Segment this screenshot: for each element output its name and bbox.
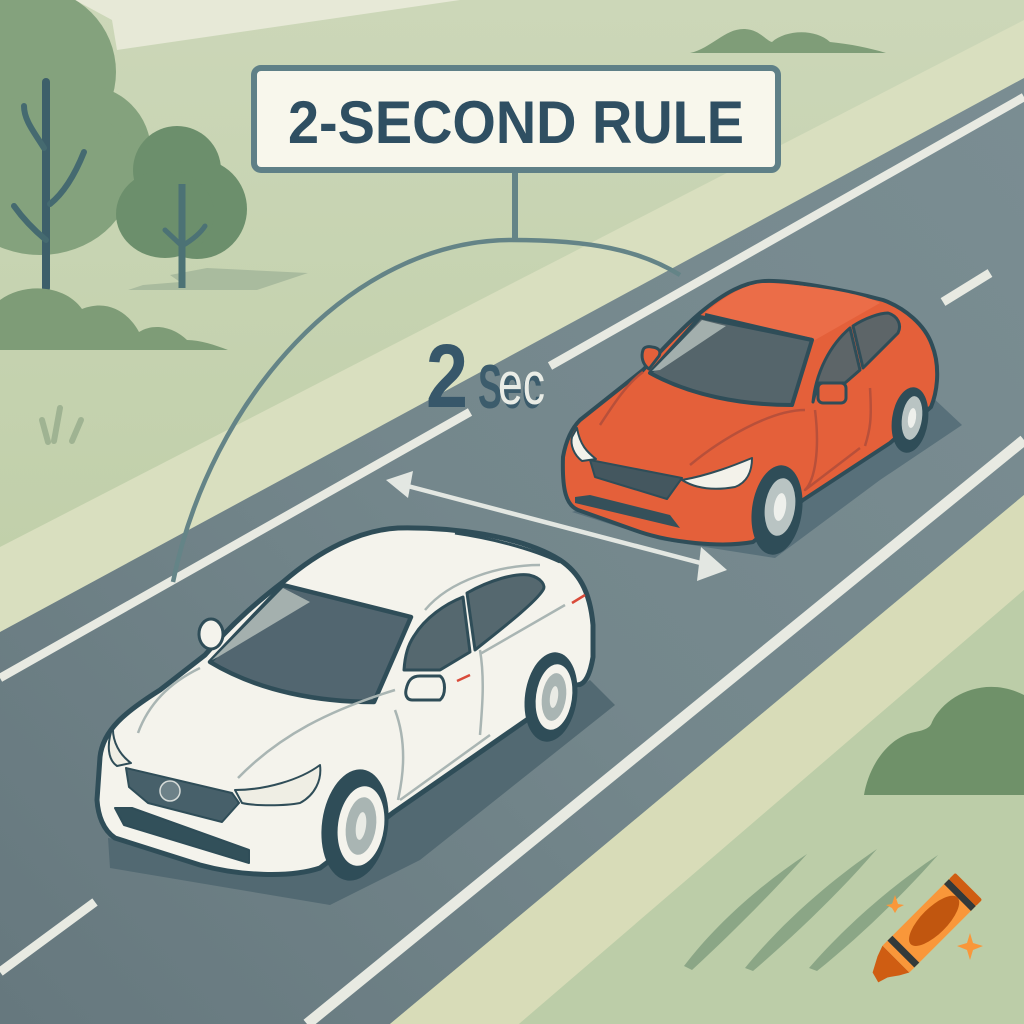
arc: timing arc	[173, 240, 680, 582]
distance arrow	[386, 471, 727, 581]
white car rear wheel	[519, 649, 583, 745]
white car side windows	[404, 597, 470, 670]
white car red accents	[457, 595, 585, 681]
label: 2 sec: 2	[426, 327, 468, 427]
white car headlights	[235, 765, 320, 805]
tree: small tree	[116, 126, 247, 288]
white car logo	[160, 781, 180, 801]
sign: 2-second rule: 2-SECOND RULE	[288, 89, 744, 156]
red car panel lines	[600, 372, 871, 490]
red car windshield	[650, 317, 812, 405]
icon: sparkles	[886, 895, 983, 960]
red car roof	[705, 283, 880, 340]
background: lower grass	[519, 590, 1024, 1024]
red car front wheel	[746, 462, 808, 558]
red car body	[563, 281, 937, 544]
white car mirrors	[406, 676, 444, 700]
white car intake	[115, 808, 249, 863]
sign: 2-second rule	[254, 68, 778, 170]
white car grille	[126, 768, 239, 822]
bush: left	[0, 288, 228, 350]
grass strokes: lower right	[684, 849, 938, 971]
background: beige verge upper	[0, 20, 1024, 640]
label: 2 sec	[426, 327, 545, 427]
label: 2 sec: ec	[498, 350, 545, 417]
tree: large left tree	[0, 0, 151, 288]
car: white	[97, 528, 615, 905]
white car windshield	[210, 585, 411, 702]
sign post	[512, 170, 518, 242]
label: 2 sec: Sec	[478, 353, 542, 422]
white car shadow	[108, 680, 615, 905]
red car headlights	[682, 458, 752, 489]
red car intake	[575, 495, 680, 528]
red car rear wheel	[888, 385, 932, 455]
bush: distant top	[690, 29, 886, 53]
white car panel lines	[138, 565, 565, 800]
white car front wheel	[315, 765, 395, 885]
grass tuft: left	[42, 408, 81, 442]
icon: crayon	[862, 873, 982, 993]
red car shadow	[572, 395, 962, 558]
red car grille	[590, 460, 682, 499]
red car mirrors	[818, 383, 846, 403]
background: beige verge lower	[390, 495, 1024, 1024]
white car body	[97, 528, 593, 874]
tree shadow	[128, 268, 308, 290]
background: pale sky band	[75, 0, 460, 50]
red car side windows	[813, 328, 860, 402]
white car rear spoiler line	[455, 533, 560, 562]
bush: lower right	[864, 687, 1024, 795]
car: red	[563, 281, 962, 558]
